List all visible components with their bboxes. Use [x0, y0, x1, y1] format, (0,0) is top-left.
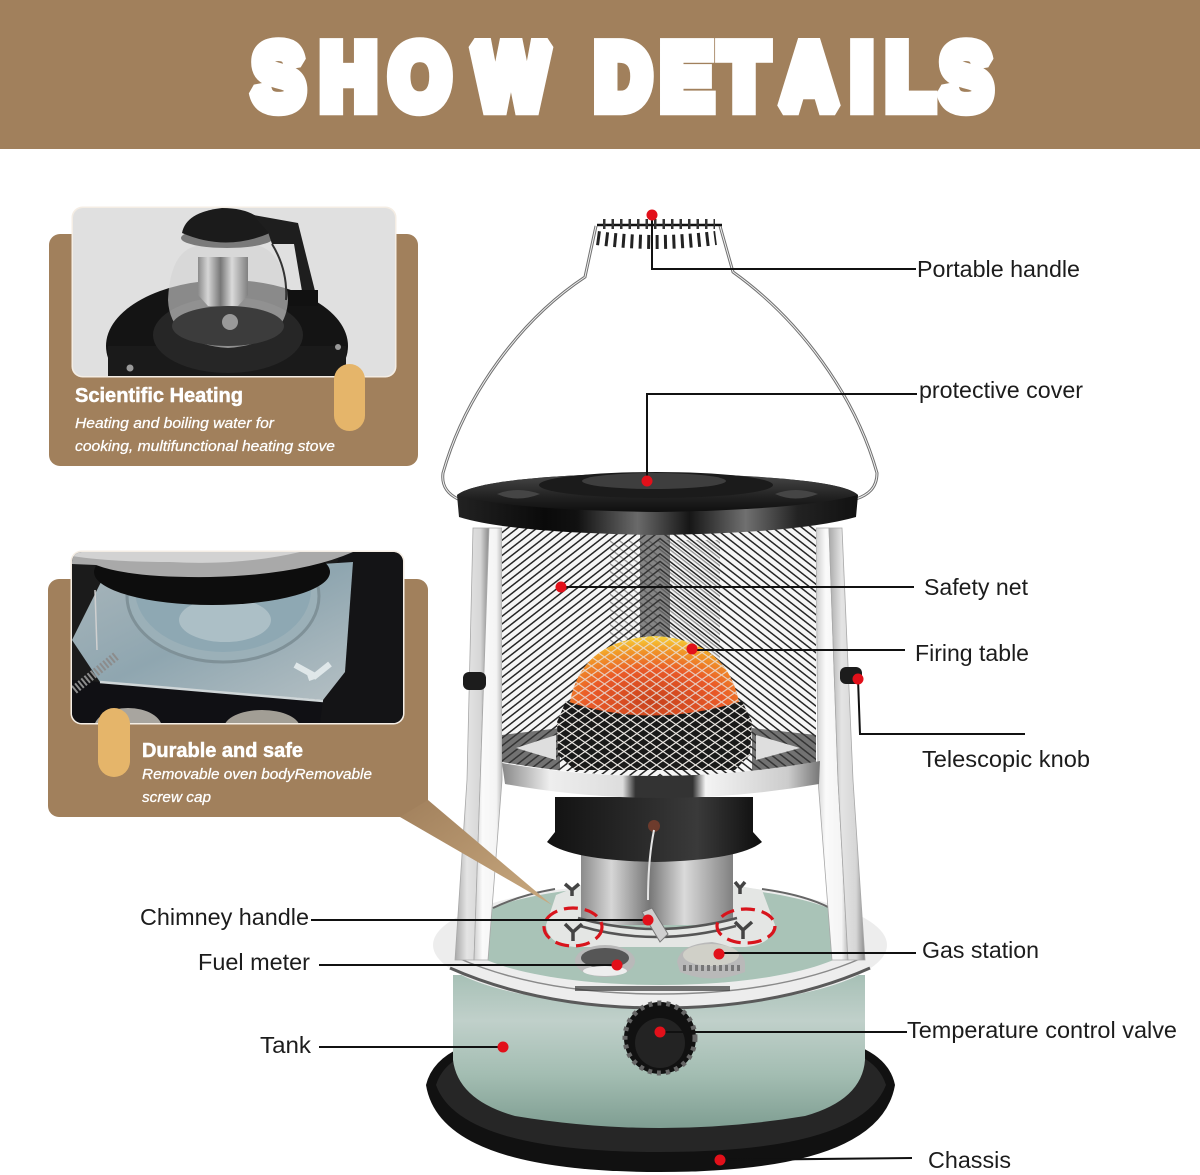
accent pill [98, 708, 130, 777]
accent pill [334, 364, 365, 431]
label: portable handle: Portable handle [917, 256, 1080, 282]
leader: firing table [692, 649, 905, 651]
logo strip [575, 986, 730, 991]
gas station cap [677, 942, 745, 978]
leader: temperature control valve [660, 1031, 907, 1033]
label: gas station: Gas station [922, 937, 1039, 963]
leader: safety net [561, 586, 914, 588]
top cover [457, 472, 858, 535]
title: SHOW DETAILS [253, 26, 992, 127]
callouts [311, 215, 1025, 1160]
label: chassis: Chassis [928, 1147, 1011, 1173]
photo: burner plate close up [70, 550, 404, 724]
leader: protective cover [647, 394, 917, 481]
label: firing table: Firing table [915, 640, 1029, 666]
label: chimney handle: Chimney handle [140, 904, 309, 930]
safety net [502, 524, 816, 794]
burner base [557, 701, 752, 770]
label: temperature control valve: Temperature control valve [907, 1017, 1177, 1043]
label: tank: Tank [260, 1032, 311, 1058]
support legs [455, 528, 865, 960]
leader: telescopic knob [858, 679, 1025, 734]
header banner [0, 0, 1200, 149]
firing table flame dome [570, 636, 739, 716]
fuel meter [575, 945, 635, 977]
carrying handle [443, 224, 877, 499]
panel heading: Durable and safe [142, 740, 303, 762]
leader: chassis [720, 1158, 912, 1160]
green tank top [460, 885, 860, 985]
heater illustration [426, 224, 895, 1172]
rear rim shadow lines [493, 889, 830, 908]
leader: tank [319, 1046, 503, 1048]
panel description [75, 416, 335, 455]
chimney black [547, 797, 762, 900]
leader: chimney handle [311, 919, 648, 921]
panel description [142, 767, 372, 806]
panel: scientific heating [49, 206, 418, 466]
panel heading: Scientific Heating [75, 385, 243, 407]
panel description: Removable oven bodyRemovable [142, 767, 372, 783]
panel description: Heating and boiling water for [75, 416, 275, 432]
panel description: screw cap [142, 790, 211, 806]
panel description: cooking, multifunctional heating stove [75, 439, 335, 455]
label: safety net: Safety net [924, 574, 1028, 600]
photo: kettle on stove top [72, 206, 396, 378]
fuel tank body [453, 975, 865, 1128]
callout pointer wedge [400, 800, 552, 905]
leader: portable handle [652, 215, 916, 269]
panel: durable and safe [48, 528, 428, 817]
leader: fuel meter [319, 964, 617, 966]
silver tank ring [433, 883, 887, 1008]
burner bracket plate [546, 885, 775, 947]
dashed red marker right [717, 909, 775, 943]
label: protective cover: protective cover [919, 377, 1083, 403]
telescopic knobs [463, 667, 862, 690]
label: fuel meter: Fuel meter [198, 949, 310, 975]
wing nuts [565, 882, 752, 941]
leader: gas station [719, 952, 916, 954]
dashed red marker left [544, 908, 602, 946]
tank base dish (chassis) [426, 1047, 895, 1172]
label: telescopic knob: Telescopic knob [922, 746, 1090, 772]
chimney handle tab [642, 908, 668, 942]
temperature control valve [624, 1002, 696, 1074]
red marker dots [498, 210, 864, 1166]
chimney silver cylinder [581, 850, 733, 925]
chimney collar [578, 918, 737, 937]
tray ring [502, 761, 820, 798]
